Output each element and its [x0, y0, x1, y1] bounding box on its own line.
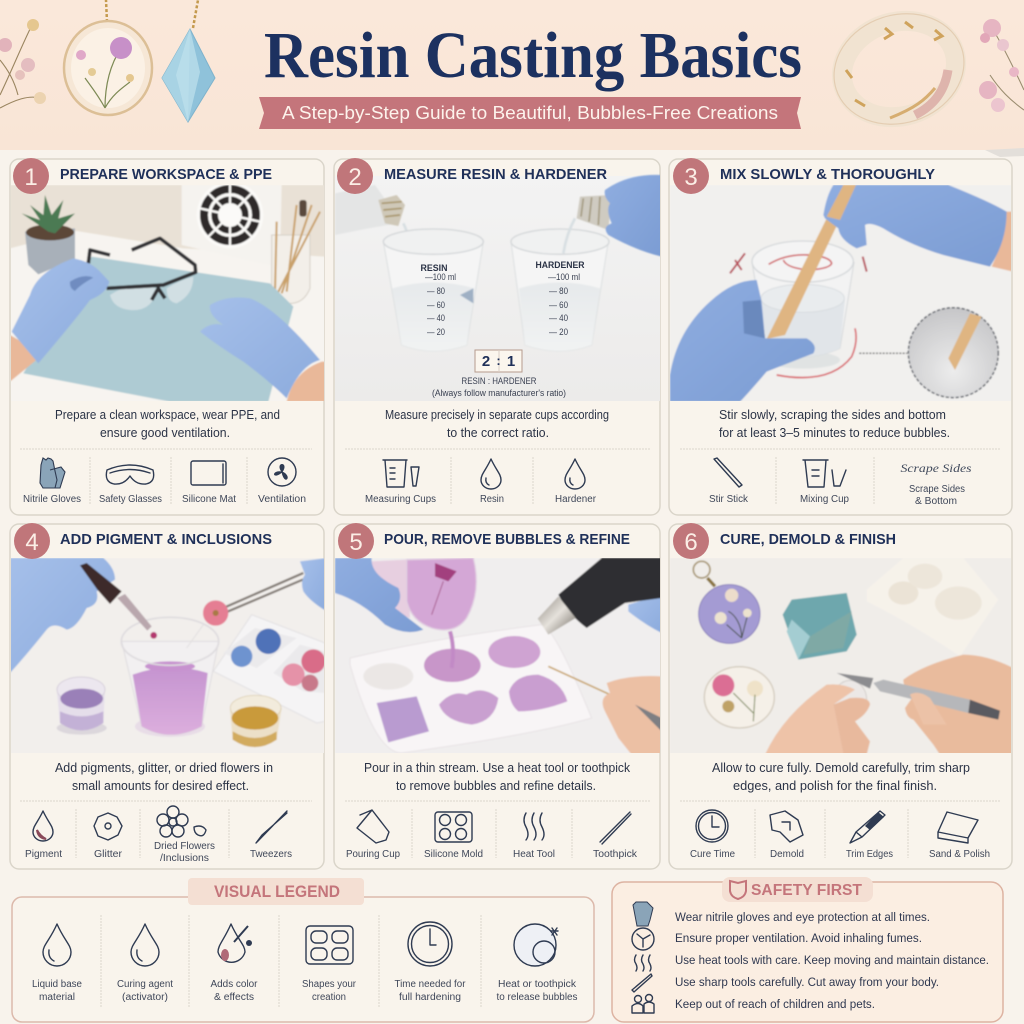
legend: mold: creation [312, 992, 346, 1003]
step 2 photo: measuring cups: (Always follow manufacturer's ratio) [432, 388, 566, 399]
step 3 number badge [673, 158, 709, 194]
legend: hardener drop: Curing agent [117, 979, 173, 990]
step 2 heading: MEASURE RESIN & HARDENER [384, 166, 607, 183]
panel: step 4 [10, 523, 327, 869]
step 1 description: Prepare a clean workspace, wear PPE, and [55, 408, 280, 422]
icon: scrape sides label: Scrape Sides [909, 484, 965, 495]
step 2 photo: measuring cups: — 60 [427, 300, 445, 310]
icon: pigment [25, 811, 62, 860]
icon: toothpick: Toothpick [593, 849, 638, 860]
safety: sharp tools rule: Use sharp tools carefully. Cut away from your body. [675, 975, 939, 989]
step 3 photo: stirring [670, 185, 1013, 402]
legend: hardener drop [117, 924, 173, 1003]
step 5 number badge [338, 523, 374, 559]
step 5 description: Pour in a thin stream. Use a heat tool or toothpick [364, 761, 631, 775]
step 4 heading: ADD PIGMENT & INCLUSIONS [60, 531, 272, 548]
step 2 photo: measuring cups: — 80 [427, 286, 445, 296]
decoration: blue crystal pendant [162, 0, 215, 122]
step 1 number badge: 1 [24, 164, 38, 191]
legend: clock: Time needed for [394, 979, 466, 990]
step 4 number badge: 4 [25, 529, 39, 556]
icon: silicone mat: Silicone Mat [182, 494, 236, 505]
legend: resin drop: material [39, 992, 75, 1003]
step 5 heading: POUR, REMOVE BUBBLES & REFINE [384, 531, 630, 548]
icon: cure time clock: Cure Time [690, 849, 735, 860]
icon: safety glasses [99, 465, 162, 505]
icon: mixing cup: Mixing Cup [800, 494, 849, 505]
step 2 photo: measuring cups: HARDENER [536, 260, 585, 271]
step 2 photo: measuring cups [335, 175, 662, 401]
legend: hardener drop: (activator) [122, 992, 168, 1003]
safety: gloves rule: Wear nitrile gloves and eye protection at all times. [675, 910, 930, 924]
step 6 description: Allow to cure fully. Demold carefully, trim sharp [712, 761, 970, 775]
safety: children rule: Keep out of reach of children and pets. [675, 997, 875, 1011]
icon: measuring cups: Measuring Cups [365, 494, 436, 505]
safety: heat rule: Use heat tools with care. Keep moving and maintain distance. [675, 953, 989, 967]
legend heading tag [188, 878, 364, 905]
step 1 heading: PREPARE WORKSPACE & PPE [60, 166, 272, 183]
decoration: round flower pendant [64, 0, 152, 115]
ratio 2:1: : [496, 353, 501, 368]
step 2 description: Measure precisely in separate cups according [385, 408, 609, 422]
legend: bubbles: Heat or toothpick [498, 979, 577, 990]
icon: safety glasses: Safety Glasses [99, 494, 162, 505]
step 6 description [712, 761, 970, 793]
icon: demold [770, 811, 804, 860]
step 3 description: for at least 3–5 minutes to reduce bubbles. [719, 426, 950, 440]
safety heading tag: SAFETY FIRST [751, 882, 862, 899]
safety: ventilation rule: Ensure proper ventilation. Avoid inhaling fumes. [675, 931, 922, 945]
icon: stir stick [709, 458, 749, 505]
icon: ventilation fan: Ventilation [258, 494, 306, 505]
legend: clock: full hardening [399, 992, 461, 1003]
icon: mixing cup [800, 460, 849, 505]
icon: resin drop [480, 459, 504, 505]
step 2 description: to the correct ratio. [447, 426, 549, 440]
header banner [0, 0, 1024, 157]
icon: pigment: Pigment [25, 849, 62, 860]
icon: glitter: Glitter [94, 849, 123, 860]
icon: glitter [94, 813, 123, 860]
icon: dried flowers: Dried Flowers [154, 841, 215, 852]
icon: silicone mold: Silicone Mold [424, 849, 483, 860]
icon: silicone mold [424, 812, 483, 860]
step 3 number badge: 3 [684, 164, 698, 191]
step 5 description [364, 761, 631, 793]
legend: bubbles [496, 924, 578, 1003]
step 5 description: to remove bubbles and refine details. [396, 779, 596, 793]
panel: safety first [612, 877, 1003, 1022]
panel: step 3 [669, 158, 1013, 515]
step 1 number badge [13, 158, 49, 194]
icon: resin drop: Resin [480, 494, 504, 505]
decoration: resin ring [820, 0, 978, 141]
subtitle ribbon [259, 97, 801, 129]
legend: bubbles: to release bubbles [496, 992, 578, 1003]
icon: sand and polish [929, 812, 990, 860]
icon: sand and polish: Sand & Polish [929, 849, 990, 860]
step 2 photo: measuring cups: — 80 [549, 286, 568, 296]
icon: tweezers [250, 811, 292, 860]
icon: cure time clock [690, 810, 735, 860]
title: Resin Casting Basics [264, 19, 802, 92]
icon: scrape sides label: & Bottom [915, 496, 957, 507]
step 2 photo: measuring cups: RESIN [420, 263, 448, 274]
icon: tweezers: Tweezers [250, 849, 292, 860]
icon: stir stick: Stir Stick [709, 494, 749, 505]
icon: measuring cups [365, 460, 436, 505]
legend heading tag: VISUAL LEGEND [214, 882, 340, 901]
ratio 2:1 [475, 350, 522, 372]
step 4 description: small amounts for desired effect. [72, 779, 249, 793]
step 3 heading: MIX SLOWLY & THOROUGHLY [720, 166, 935, 183]
icon: nitrile gloves [23, 458, 81, 505]
legend: pigment drop [210, 924, 258, 1003]
step 4 number badge [14, 523, 50, 559]
ratio 2:1: 1 [507, 353, 515, 370]
step 6 heading: CURE, DEMOLD & FINISH [720, 531, 896, 548]
step 2 photo: measuring cups: — 20 [427, 327, 445, 337]
legend: resin drop [32, 924, 82, 1003]
subtitle ribbon: A Step-by-Step Guide to Beautiful, Bubbles-Free Creations [282, 102, 778, 123]
step 1 description [55, 408, 280, 440]
step 4 description [55, 761, 273, 793]
panel: step 1 [10, 158, 327, 515]
step 6 description: edges, and polish for the final finish. [733, 779, 937, 793]
step 2 photo: measuring cups: RESIN : HARDENER [462, 376, 537, 387]
decoration: pressed flowers right [979, 19, 1024, 112]
icon: trim edges knife: Trim Edges [846, 849, 893, 860]
icon: pouring cup: Pouring Cup [346, 849, 400, 860]
step 4 photo: pigments [10, 558, 327, 755]
safety: heat rule [634, 953, 989, 971]
icon: scrape sides label [900, 461, 972, 507]
legend: mold: Shapes your [302, 979, 357, 990]
step 3 description: Stir slowly, scraping the sides and bottom [719, 408, 946, 422]
step 2 photo: measuring cups: — 20 [549, 327, 568, 337]
icon: scrape sides label: Scrape Sides [900, 461, 972, 475]
legend: mold [302, 926, 357, 1003]
step 6 number badge: 6 [684, 529, 698, 556]
icon: hardener drop: Hardener [555, 494, 597, 505]
legend: clock [394, 922, 466, 1003]
step 2 photo: measuring cups: —100 ml [548, 272, 580, 282]
step 2 description [385, 408, 609, 440]
icon: dried flowers [154, 806, 215, 864]
icon: demold: Demold [770, 849, 804, 860]
safety heading tag [722, 877, 873, 902]
step 6 number badge [673, 523, 709, 559]
icon: trim edges knife [846, 811, 893, 860]
safety: children rule [632, 994, 875, 1013]
step 6 photo: finished pieces [670, 558, 1013, 755]
panel: step 6 [669, 523, 1013, 869]
icon: nitrile gloves: Nitrile Gloves [23, 494, 81, 505]
icon: heat tool waves [513, 813, 555, 860]
panel: step 5 [334, 523, 662, 869]
step 2 photo: measuring cups: — 40 [427, 313, 445, 323]
step 3 description [719, 408, 950, 440]
icon: silicone mat [182, 461, 236, 505]
step 2 number badge: 2 [348, 164, 362, 191]
step 5 photo: pour and bubbles [335, 558, 662, 755]
legend: pigment drop: & effects [214, 992, 254, 1003]
panel: visual legend [12, 878, 594, 1022]
icon: pouring cup [346, 810, 400, 860]
safety: ventilation rule [632, 928, 922, 950]
step 1 photo: workspace [10, 182, 327, 402]
step 2 photo: measuring cups: — 40 [549, 313, 568, 323]
decoration: pressed flowers left [0, 19, 46, 108]
icon: dried flowers: /Inclusions [160, 853, 209, 864]
icon: heat tool waves: Heat Tool [513, 849, 555, 860]
legend: pigment drop: Adds color [210, 979, 258, 990]
icon: ventilation fan [258, 458, 306, 505]
safety: gloves rule [633, 902, 930, 926]
step 2 number badge [337, 158, 373, 194]
step 5 number badge: 5 [349, 529, 363, 556]
safety: sharp tools rule [632, 974, 939, 992]
ratio 2:1: 2 [482, 353, 490, 370]
panel: step 2 [334, 158, 662, 515]
legend: resin drop: Liquid base [32, 979, 82, 990]
icon: toothpick [593, 812, 638, 860]
step 1 description: ensure good ventilation. [100, 426, 230, 440]
step 2 photo: measuring cups: —100 ml [425, 272, 456, 282]
step 2 photo: measuring cups: — 60 [549, 300, 568, 310]
icon: hardener drop [555, 459, 597, 505]
step 4 description: Add pigments, glitter, or dried flowers in [55, 761, 273, 775]
